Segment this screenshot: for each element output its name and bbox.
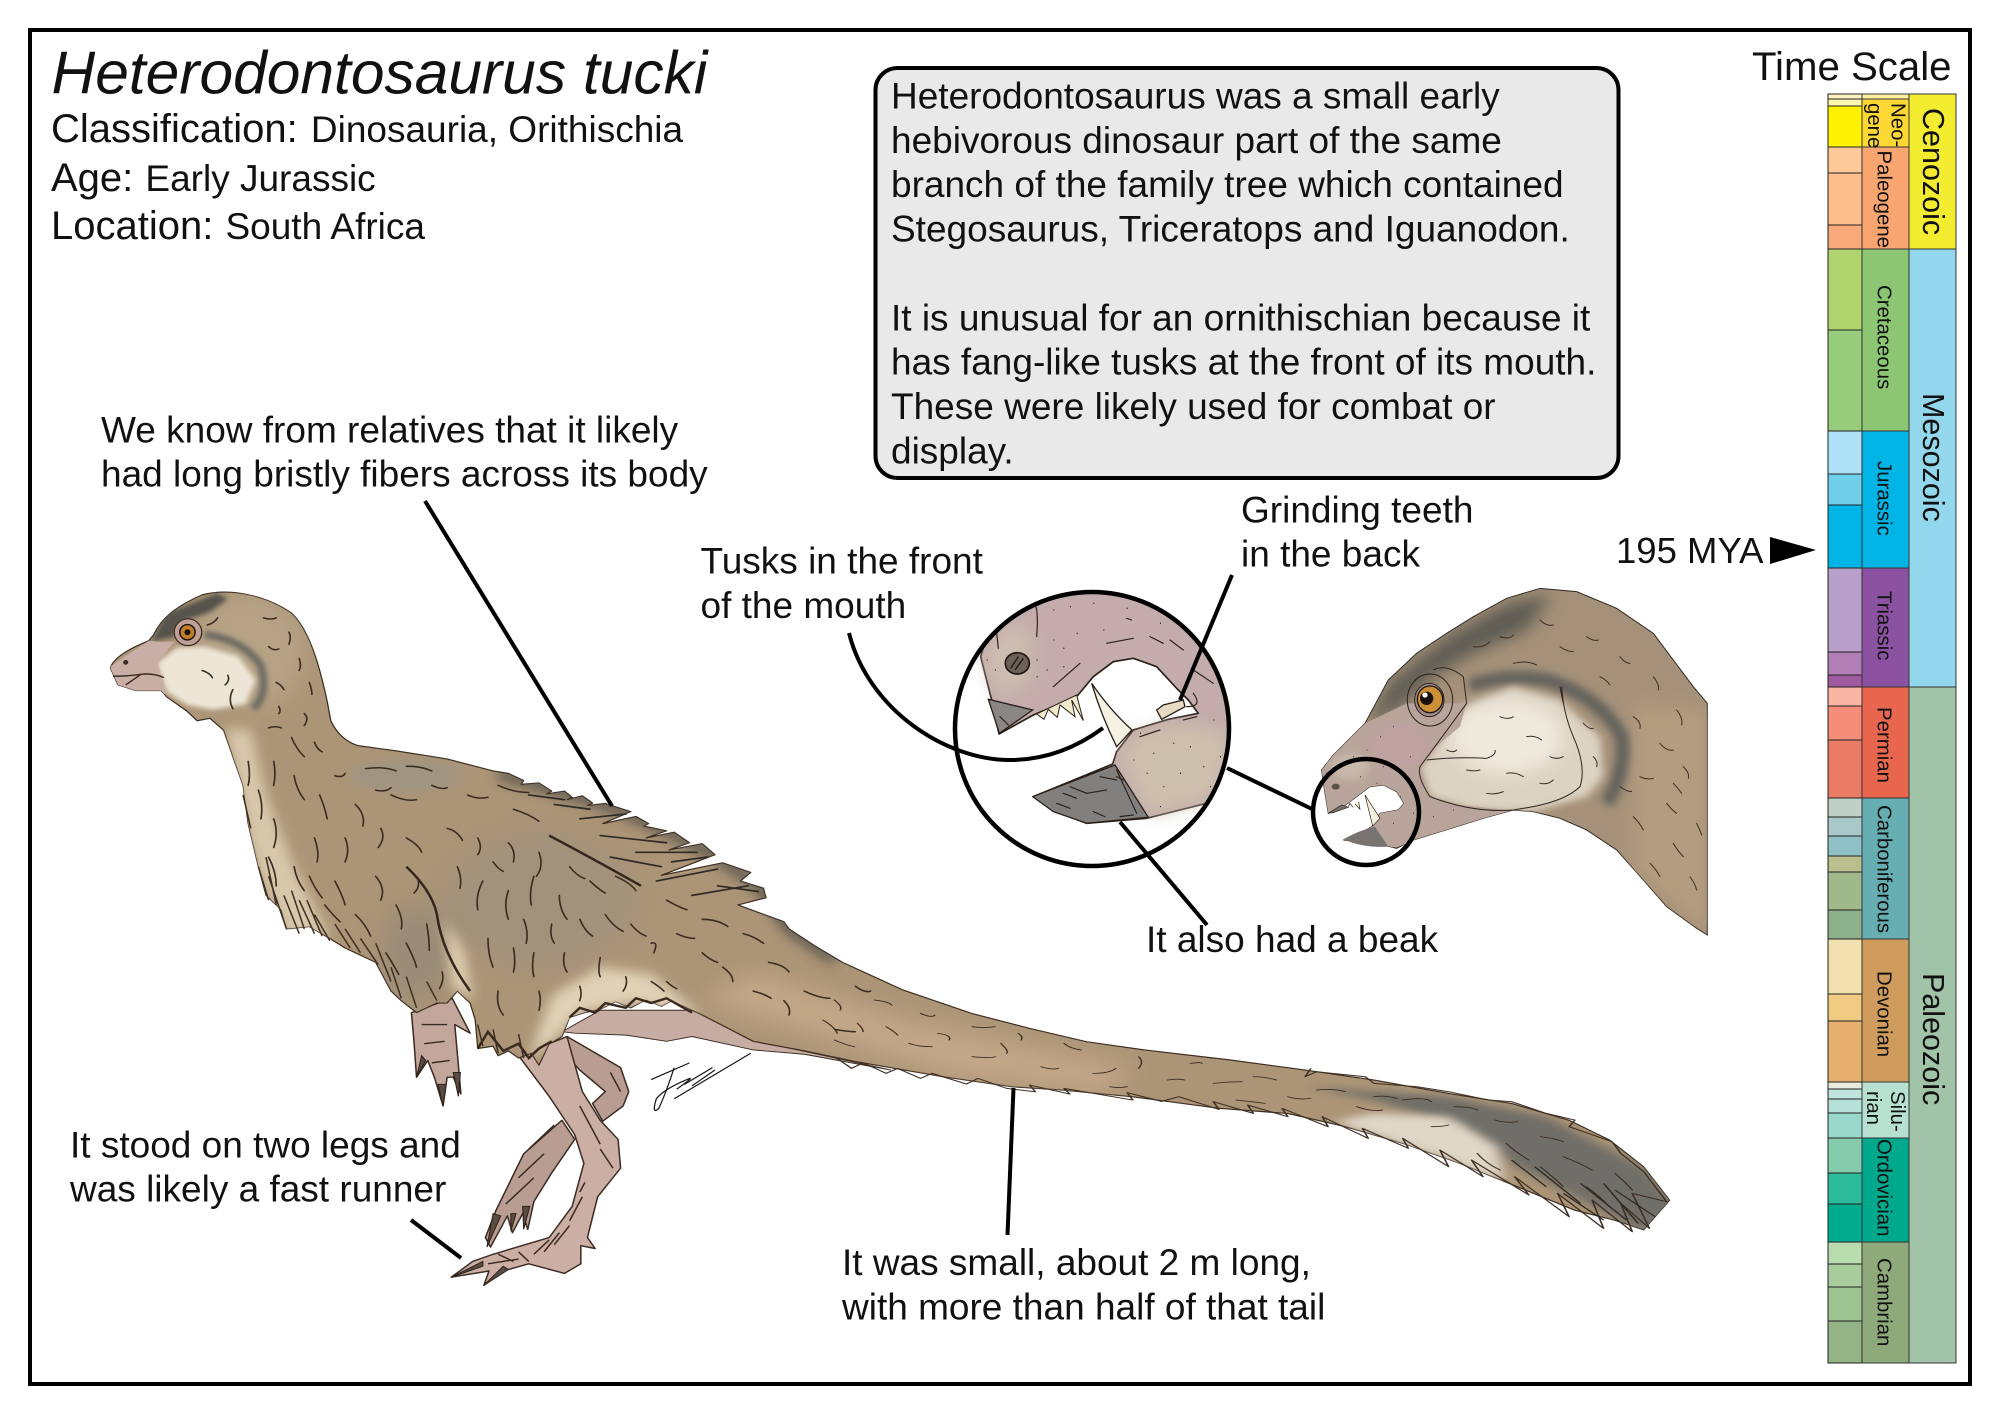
tail fur marks: [823, 1000, 1632, 1207]
period labels: gene: [1863, 103, 1885, 148]
small size text: It was small, about 2 m long,: [842, 1242, 1311, 1283]
period labels: Permian: [1872, 707, 1894, 783]
back spines marks: [529, 795, 758, 895]
large magnifier circle: [955, 592, 1229, 866]
body fur marks: [202, 618, 871, 1032]
info box text: branch of the family tree which contained: [891, 164, 1564, 205]
tusk: [1092, 683, 1132, 747]
grinding teeth text: Grinding teeth: [1241, 490, 1473, 530]
cheek shadow: [205, 635, 263, 709]
bristly fibers text: [101, 410, 708, 494]
tail tip shading: [1305, 1087, 1678, 1233]
tail tip bristles: [1512, 1160, 1655, 1223]
near leg: [451, 1037, 621, 1285]
era labels: [1916, 108, 1950, 1105]
upper beak: [988, 699, 1033, 733]
beak leader: [1120, 822, 1207, 925]
soft colour patches: [108, 593, 1678, 1233]
age line: Age: Early Jurassic: [51, 156, 376, 200]
two legs text: [69, 1124, 461, 1210]
claws: [417, 1056, 530, 1285]
classification facts: [51, 107, 684, 248]
marker label: 195 MYA: [1616, 530, 1764, 571]
era labels: Paleozoic: [1916, 973, 1950, 1105]
small size text: with more than half of that tail: [841, 1286, 1325, 1328]
info box text: has fang-like tusks at the front of its mouth.: [891, 342, 1596, 382]
info box text: Heterodontosaurus was a small early: [891, 76, 1500, 116]
grinding teeth text: in the back: [1241, 534, 1420, 574]
period column: [1862, 94, 1909, 1363]
tusks text: Tusks in the front: [700, 540, 984, 582]
magnified mouth illustration: [981, 587, 1233, 823]
callout: bristly fibers: [101, 410, 708, 806]
grinding teeth leader: [1180, 575, 1232, 700]
195 MYA marker: [1616, 530, 1816, 571]
period labels: Neo-: [1886, 103, 1908, 147]
geologic time scale column: [1828, 94, 1956, 1363]
info box background: [876, 68, 1618, 478]
period labels: Devonian: [1872, 971, 1894, 1057]
era labels: Cenozoic: [1916, 108, 1950, 235]
portrait fur marks: [1447, 620, 1702, 890]
info box text: Stegosaurus, Triceratops and Iguanodon.: [891, 208, 1570, 250]
magnified skin dots: [987, 603, 1221, 807]
two legs text: was likely a fast runner: [69, 1168, 446, 1210]
grinding teeth: [1157, 700, 1185, 719]
front teeth: [1037, 695, 1083, 721]
period labels: Triassic: [1872, 591, 1894, 660]
info box: [876, 68, 1618, 478]
dark crown: [150, 593, 228, 642]
arm crease: [406, 836, 641, 991]
portrait skin and cheek lines: [1419, 668, 1582, 811]
classification line: Classification: Dinosauria, Orithischia: [51, 107, 684, 151]
magnified jaw marks: [996, 607, 1213, 817]
portrait skin stipple: [1353, 727, 1454, 823]
two legs text: It stood on two legs and: [70, 1124, 461, 1166]
callout: grinding teeth: [1180, 490, 1473, 700]
time scale heading: Time Scale: [1752, 44, 1952, 89]
grinding teeth text: [1241, 490, 1473, 574]
period labels: Ordovician: [1872, 1139, 1894, 1236]
era column: [1909, 94, 1956, 1363]
era labels: Mesozoic: [1916, 393, 1950, 522]
period labels: Silu-: [1886, 1091, 1908, 1132]
tusks text: [700, 540, 984, 626]
period labels: Jurassic: [1872, 461, 1894, 536]
belly skin: [562, 1010, 891, 1070]
dinosaur full-body illustration: [108, 592, 1678, 1285]
two legs leader: [411, 1220, 461, 1258]
arm and hand: [411, 998, 470, 1106]
period labels: rian: [1862, 1091, 1884, 1125]
nostril: [123, 660, 128, 665]
eye: [174, 619, 202, 646]
bristly fibers text: had long bristly fibers across its body: [101, 454, 708, 494]
callout: beak: [1120, 822, 1439, 960]
small size text: [841, 1242, 1325, 1328]
info box text: display.: [891, 430, 1014, 472]
chest bristles: [243, 795, 524, 1058]
white cheek: [156, 647, 256, 710]
upper jaw cream shading: [983, 627, 1030, 697]
far leg: [485, 1037, 629, 1247]
leg scale marks: [422, 1025, 621, 1264]
magnified jaw flesh: [981, 587, 1233, 823]
location line: Location: South Africa: [51, 204, 425, 248]
tail fur details: [823, 1000, 1667, 1232]
beak text: It also had a beak: [1146, 919, 1439, 960]
info box text: It is unusual for an ornithischian because it: [891, 298, 1591, 338]
lower beak: [1033, 765, 1148, 823]
bristly fibers leader: [425, 501, 612, 806]
bristly fibers text: We know from relatives that it likely: [101, 410, 679, 450]
info box text: [891, 76, 1596, 472]
small magnifier circle: [1313, 759, 1419, 865]
title: Heterodontosaurus tucki: [52, 38, 709, 106]
info box text: hebivorous dinosaur part of the same: [891, 120, 1502, 161]
callout: two legs: [69, 1124, 461, 1258]
body, neck, head and tail silhouette: [110, 592, 1670, 1230]
period labels: Cretaceous: [1872, 285, 1894, 389]
info box text: These were likely used for combat or: [891, 386, 1496, 427]
period labels: Paleogene: [1872, 150, 1894, 248]
skin of snout: [108, 641, 174, 695]
belly fur fringe: [478, 998, 692, 1058]
period labels: Cambrian: [1872, 1258, 1894, 1346]
small size leader: [1008, 1088, 1014, 1235]
portrait fur shading: [1633, 703, 1707, 935]
connector between magnifier circles: [1227, 768, 1312, 809]
lower jaw cream shading: [1120, 725, 1230, 815]
period labels: [1862, 103, 1908, 1346]
period labels: Carboniferous: [1872, 805, 1894, 933]
callout: small size: [841, 1088, 1325, 1328]
beak mouth line: [113, 674, 164, 685]
stage column: [1828, 94, 1862, 1363]
tusks text: of the mouth: [700, 585, 906, 626]
artist signature: [651, 1053, 751, 1110]
marker arrow: [1770, 537, 1816, 564]
tusks leader: [849, 633, 1103, 760]
nostril: [1005, 653, 1029, 674]
portrait mouth parts: [1328, 784, 1388, 847]
head close-up illustration: [1317, 588, 1707, 935]
portrait eye: [1407, 674, 1453, 726]
tail fur edge: [834, 1057, 1667, 1232]
callout: tusks: [700, 540, 1103, 760]
